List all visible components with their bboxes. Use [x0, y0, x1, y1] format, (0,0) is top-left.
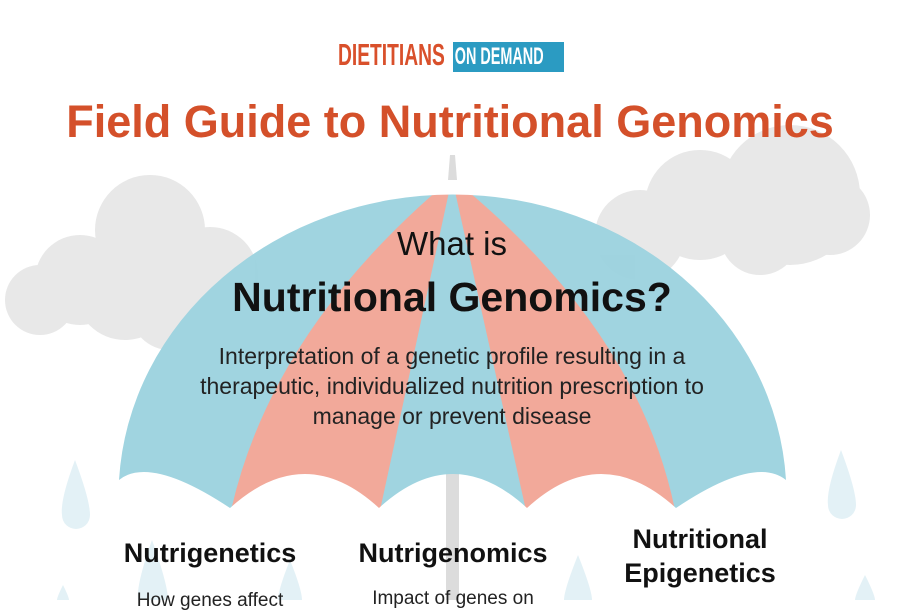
definition text: Interpretation of a genetic profile resulting in a — [219, 343, 685, 369]
umbrella shaft — [446, 155, 459, 600]
heading: Nutritional Epigenetics — [624, 524, 776, 588]
definition text: manage or prevent disease — [313, 403, 591, 429]
definition text — [200, 343, 704, 429]
logo: DIETITIANS — [338, 37, 445, 72]
logo: ON DEMAND — [455, 43, 544, 70]
cloud right — [595, 125, 870, 280]
heading: Nutritional Epigenetics: Nutritional — [632, 524, 768, 554]
heading: Nutrigenetics: Nutrigenetics — [124, 538, 296, 568]
umbrella heading: What is — [397, 225, 507, 262]
text: nutrigenomics description: Impact of genes on — [372, 588, 534, 609]
raindrops — [57, 450, 875, 600]
logo — [338, 37, 564, 72]
text: nutrigenetics description: How genes affect — [137, 590, 283, 611]
umbrella heading — [232, 225, 672, 320]
cloud left — [5, 175, 258, 350]
heading: Nutritional Epigenetics: Epigenetics — [624, 558, 776, 588]
title: Field Guide to Nutritional Genomics — [66, 96, 834, 147]
umbrella heading: Nutritional Genomics? — [232, 274, 672, 320]
umbrella canopy — [119, 194, 786, 508]
definition text: therapeutic, individualized nutrition prescription to — [200, 373, 704, 399]
heading: Nutrigenomics: Nutrigenomics — [358, 538, 548, 568]
